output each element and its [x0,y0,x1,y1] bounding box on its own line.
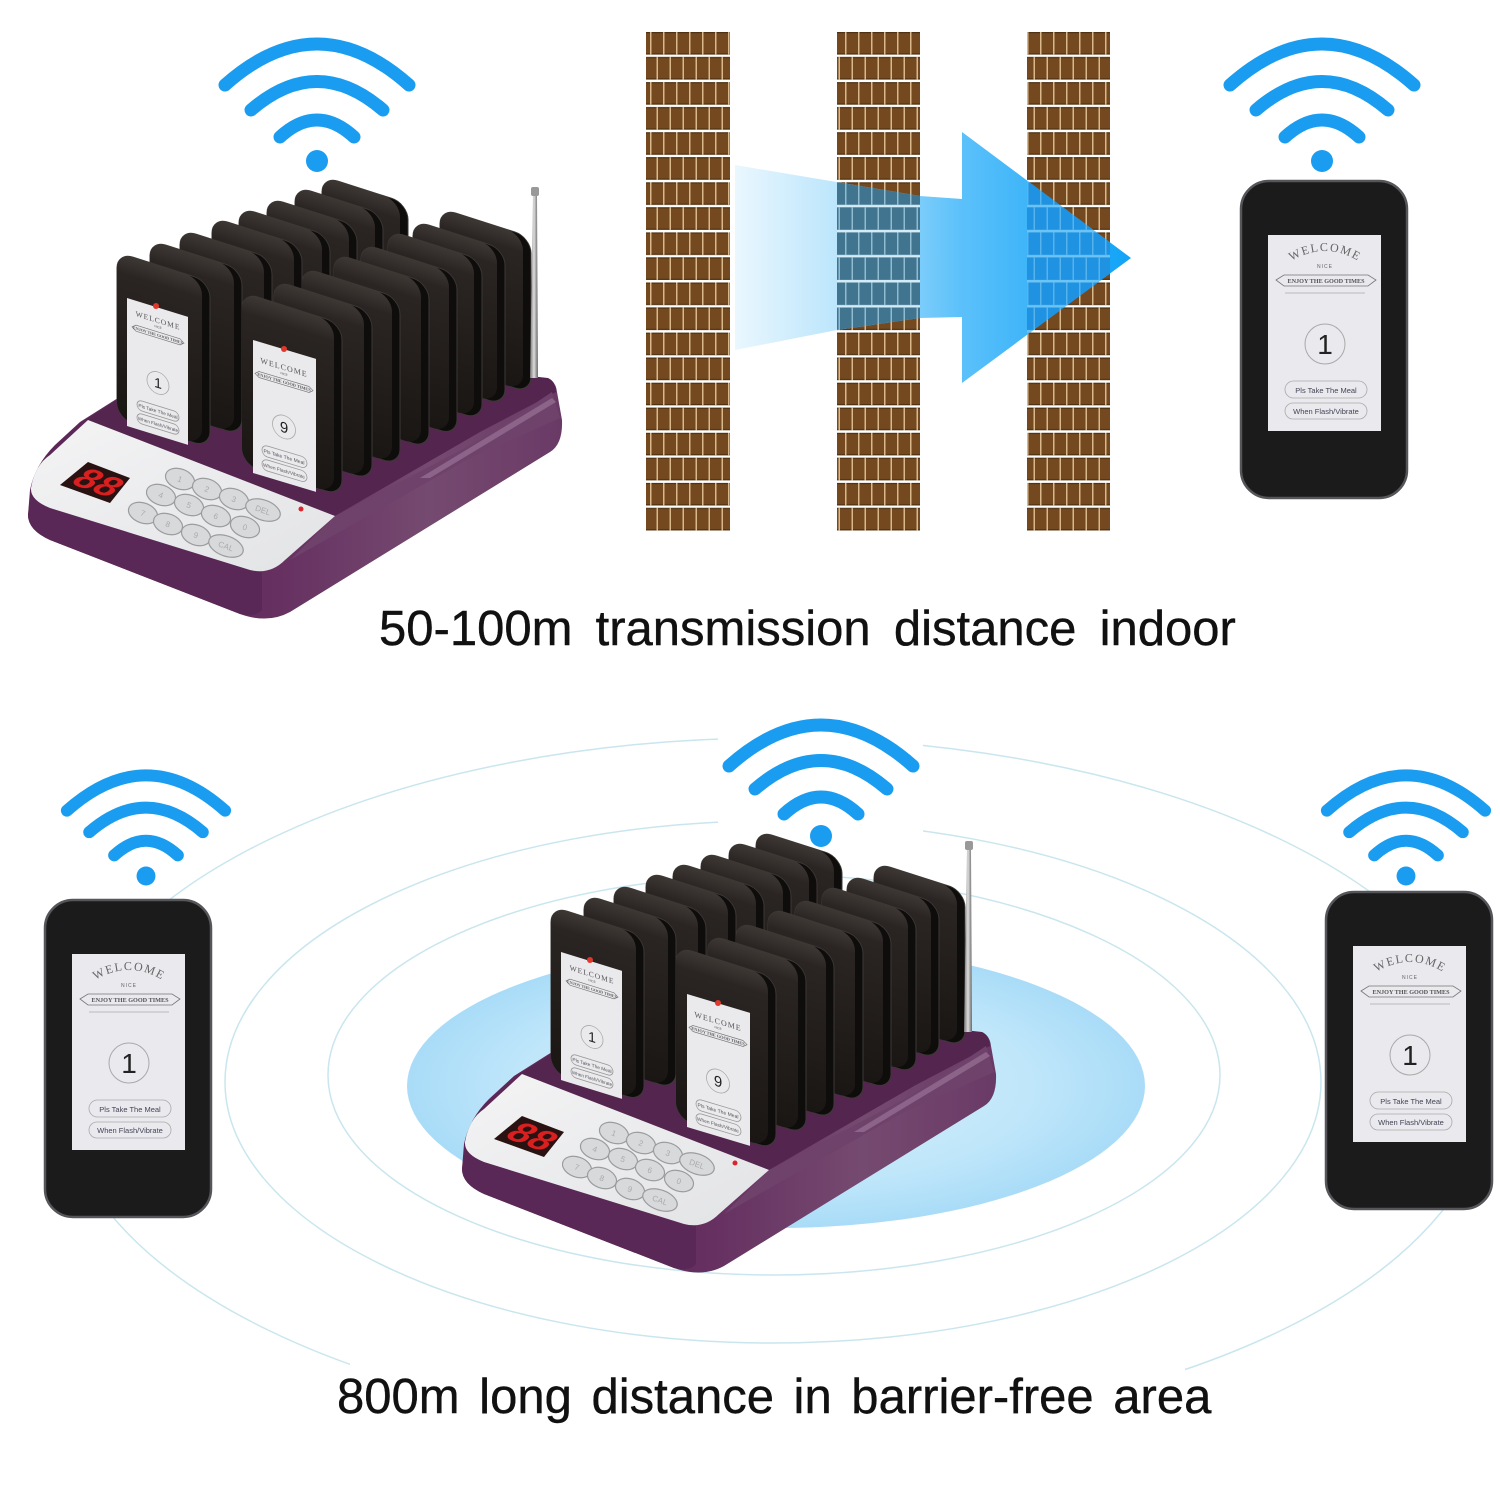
base station: indoor: 88 [63,462,135,503]
pager: right: When Flash/Vibrate [1378,1118,1444,1127]
pager labels and keypad text: 9 [626,1184,634,1195]
coverage ring: outer [59,738,1491,1432]
pager labels and keypad text: 3 [664,1148,672,1159]
pager: right: ENJOY THE GOOD TIMES [1372,989,1450,996]
pager labels and keypad text: 4 [591,1144,599,1155]
pager labels and keypad text: DEL [688,1158,706,1172]
pager labels and keypad text: 6 [646,1165,654,1176]
pager labels and keypad text: 0 [241,522,249,533]
pager labels and keypad text: When Flash/Vibrate [572,1070,612,1087]
icon: wifi above right pager [1327,775,1485,885]
icon: wifi above base station [225,44,409,172]
pager: top right: WELCOME [1288,243,1360,260]
base station: central: 88 [497,1116,569,1157]
pager labels and keypad text [132,308,313,554]
top wall 1 [646,32,730,532]
icon: wifi above top pager [1230,44,1414,172]
pager labels and keypad text: Pls Take The Meal [264,448,304,467]
pager labels and keypad text: WELCOME [260,356,308,379]
pager labels and keypad text: CAL [217,540,235,554]
pager: top right: Pls Take The Meal [1295,386,1357,395]
pager: right [1324,890,1494,1210]
pager labels and keypad text: Pls Take The Meal [698,1102,738,1121]
pager labels and keypad text: 2 [637,1138,645,1149]
pager labels and keypad text: WELCOME [570,963,614,986]
pager labels and keypad text: Pls Take The Meal [138,403,178,421]
pager labels and keypad text: ENJOY THE GOOD TIMES [133,325,184,345]
pager labels and keypad text: 9 [192,530,200,541]
heading: barrier-free distance: 800m long distance in barrier-free area [337,1370,1212,1424]
pager labels and keypad text: CAL [651,1194,669,1208]
pager labels and keypad text: NICE [714,1025,722,1031]
pager labels and keypad text: ENJOY THE GOOD TIMES [567,979,618,999]
pager: left: When Flash/Vibrate [97,1126,163,1135]
pager: right: NICE [1402,975,1418,981]
pager: left: WELCOME [92,962,164,979]
coverage area: blue ellipse [407,944,1145,1228]
pager labels and keypad text: WELCOME [694,1010,742,1033]
pager labels and keypad text: ENJOY THE GOOD TIMES [691,1026,745,1047]
pager labels and keypad text: NICE [154,324,162,330]
pager labels and keypad text: 7 [139,508,147,519]
pager labels and keypad text: When Flash/Vibrate [138,416,178,433]
pager labels and keypad text: 1 [588,1029,596,1047]
icon: wifi above central base [729,725,913,847]
top wall 3 [1027,32,1110,532]
pager: top right [1240,180,1408,500]
pager labels and keypad text: 2 [203,484,211,495]
pager labels and keypad text: 8 [598,1173,606,1184]
heading: indoor distance: 50-100m transmission distance indoor [379,602,1236,656]
arrow: signal passing through walls [735,132,1131,383]
pager labels and keypad text: 9 [280,419,288,438]
pager labels and keypad text: 5 [619,1154,627,1165]
pager labels and keypad text: NICE [280,371,288,377]
pager labels and keypad text: 1 [610,1128,618,1139]
pager: top right: NICE [1317,264,1333,270]
pager labels and keypad text: 4 [157,490,165,501]
pager labels and keypad text: NICE [588,978,596,984]
pager: top right: ENJOY THE GOOD TIMES [1287,278,1365,285]
pager labels and keypad text: 0 [675,1176,683,1187]
pager: left: Pls Take The Meal [99,1105,161,1114]
pager labels and keypad text: WELCOME [136,309,180,332]
base station: indoor [28,176,562,619]
pager: right: 1 [1402,1040,1418,1071]
pager: left: ENJOY THE GOOD TIMES [91,997,169,1004]
pager: right: WELCOME [1372,954,1445,971]
pager labels and keypad text: ENJOY THE GOOD TIMES [257,372,311,393]
pager: left: 1 [121,1048,137,1079]
pager: top right: 1 [1317,329,1333,360]
pager labels and keypad text: 1 [176,474,184,485]
icon: wifi above left pager [67,775,225,885]
pager labels and keypad text [566,962,747,1208]
pager labels and keypad text: 6 [212,511,220,522]
pager labels and keypad text: When Flash/Vibrate [263,462,305,481]
top wall 2 [837,32,920,532]
pager labels and keypad text: 5 [185,500,193,511]
base station: central [462,830,996,1273]
pager labels and keypad text: When Flash/Vibrate [697,1116,739,1135]
pager: right: Pls Take The Meal [1380,1097,1442,1106]
pager: left [44,898,212,1218]
pager labels and keypad text: 8 [164,519,172,530]
pager labels and keypad text: 7 [573,1162,581,1173]
pager labels and keypad text: 1 [154,375,162,393]
coverage ring: middle [225,821,1321,1343]
pager labels and keypad text: DEL [254,504,272,518]
pager labels and keypad text: 9 [714,1073,722,1092]
pager labels and keypad text: Pls Take The Meal [572,1057,612,1075]
pager: left: NICE [121,983,137,989]
pager labels and keypad text: 3 [230,494,238,505]
coverage ring: inner [328,875,1220,1275]
pager: top right: When Flash/Vibrate [1293,407,1359,416]
